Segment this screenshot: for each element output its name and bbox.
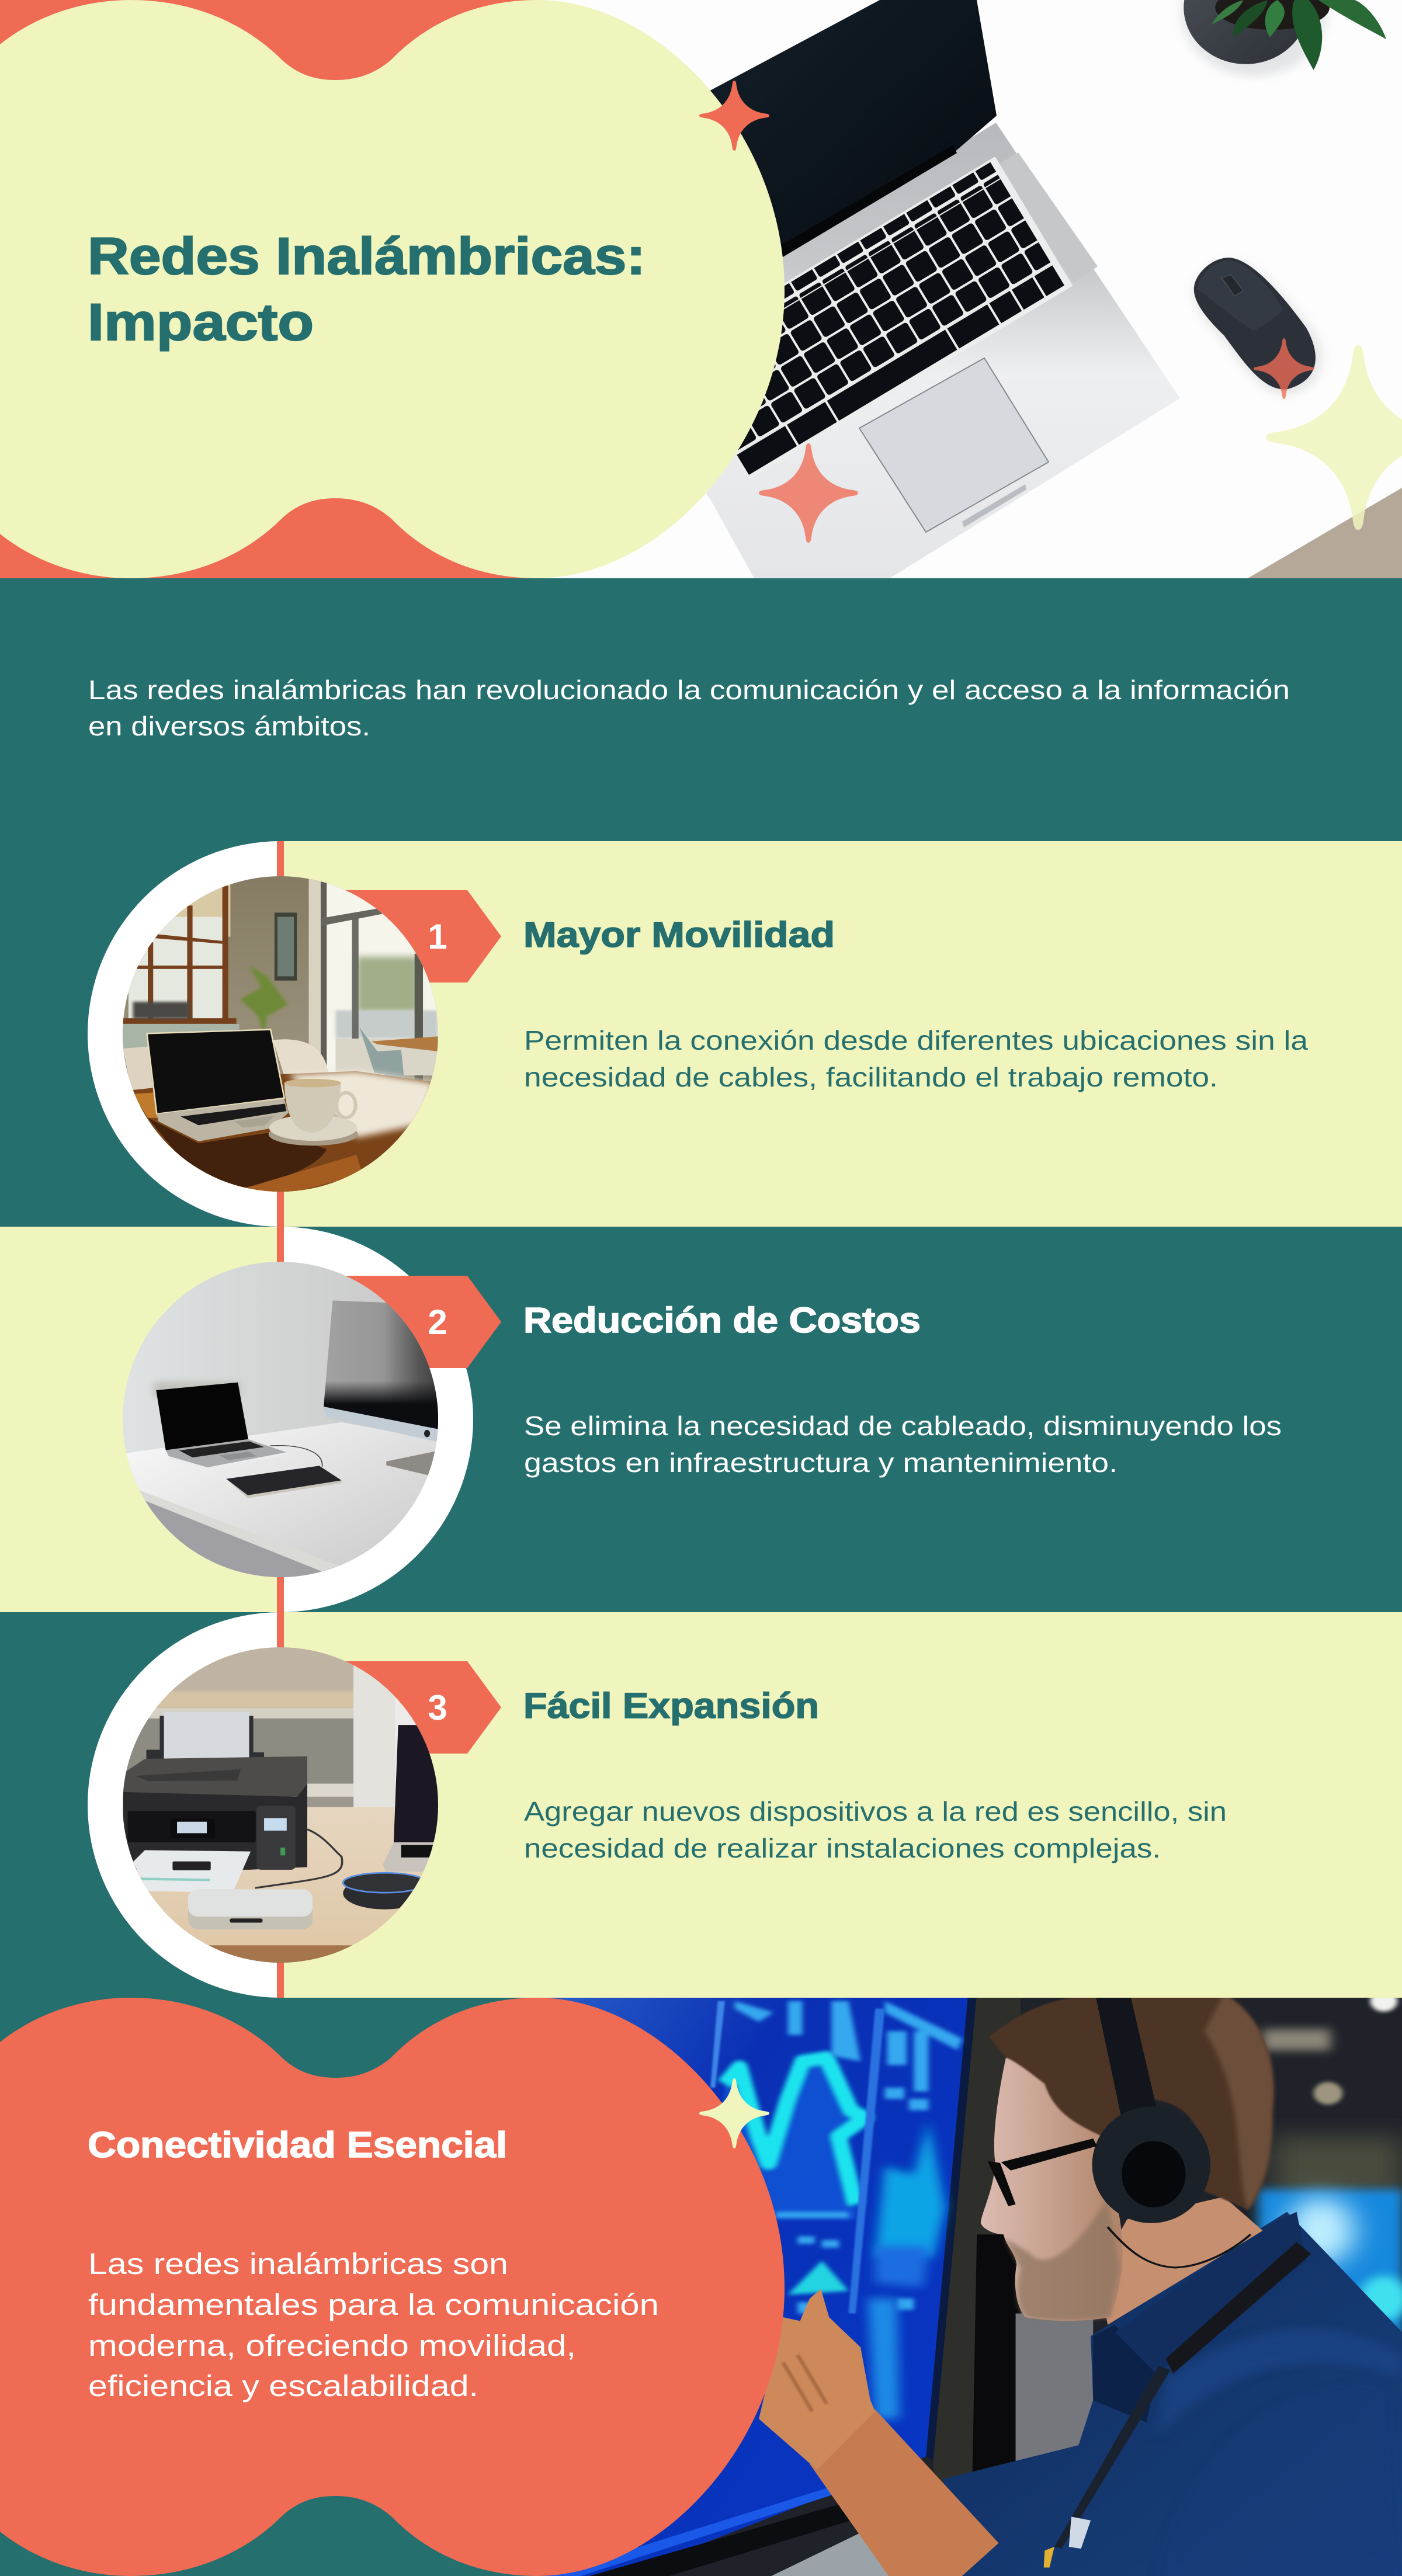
card 1 description: Permiten la conexión desde diferentes ubicaciones sin la [524, 1025, 1308, 1056]
closing blob: coral shape [0, 1998, 785, 2576]
card 2 description [524, 1411, 1282, 1478]
intro text: Las redes inalámbricas han revolucionado la comunicación y el acceso a la información [88, 675, 1290, 705]
plant and pot [1181, 0, 1386, 77]
number tag 1 [327, 890, 501, 983]
header blob: cream shape [0, 0, 785, 578]
closing paragraph: eficiencia y escalabilidad. [88, 2369, 478, 2403]
closing paragraph: fundamentales para la comunicación [88, 2288, 659, 2321]
closing paragraph: Las redes inalámbricas son [88, 2247, 508, 2280]
card 2 description: gastos en infraestructura y mantenimiento. [524, 1447, 1118, 1478]
title: Redes Inalámbricas: [88, 227, 646, 285]
title [88, 227, 646, 351]
intro text [88, 675, 1290, 741]
card 1 description: necesidad de cables, facilitando el trabajo remoto. [524, 1062, 1218, 1092]
ring: white half circle row 2 [280, 1227, 473, 1612]
intro text: en diversos ámbitos. [88, 711, 370, 741]
photo 3: printer and connected devices [118, 1643, 446, 1966]
number 2: 2 [428, 1303, 447, 1342]
card 2 heading: Reducción de Costos [523, 1300, 921, 1340]
star: coral at blob edge [699, 81, 769, 151]
card 1 description [524, 1025, 1308, 1092]
ring: white half circle row 3 [88, 1612, 280, 1998]
card 3 description [524, 1796, 1227, 1863]
hero photo: laptop on white desk [538, 0, 1402, 578]
number 1: 1 [428, 917, 447, 956]
number tag 2 [327, 1276, 501, 1368]
star: coral on mouse [1254, 338, 1314, 399]
ring: white half circle row 1 [88, 841, 280, 1227]
star: cream at closing blob edge [699, 2078, 769, 2148]
number tag 3 [327, 1661, 501, 1754]
title: Impacto [88, 293, 314, 351]
closing paragraph [88, 2247, 659, 2403]
closing blob: teal backing [0, 1998, 537, 2576]
photo 2: minimal desk with laptop and monitor [118, 1256, 446, 1580]
card 1 heading: Mayor Movilidad [523, 915, 835, 954]
card 3 description: Agregar nuevos dispositivos a la red es sencillo, sin [524, 1796, 1227, 1827]
header blob: coral backing [0, 0, 537, 578]
closing heading: Conectividad Esencial [88, 2125, 507, 2165]
photo 1: laptop and coffee in cafe [118, 872, 446, 1197]
timeline line [277, 841, 284, 1998]
card 3 description: necesidad de realizar instalaciones complejas. [524, 1833, 1161, 1863]
card 3 heading: Fácil Expansión [523, 1686, 819, 1726]
star: coral on laptop [759, 443, 858, 543]
closing photo: technician with headset at blue monitor [531, 1991, 1402, 2576]
number 3: 3 [428, 1688, 447, 1727]
wireless mouse [1194, 258, 1321, 395]
star: large cream [1266, 345, 1402, 530]
card 2 description: Se elimina la necesidad de cableado, disminuyendo los [524, 1411, 1282, 1441]
closing paragraph: moderna, ofreciendo movilidad, [88, 2329, 576, 2362]
